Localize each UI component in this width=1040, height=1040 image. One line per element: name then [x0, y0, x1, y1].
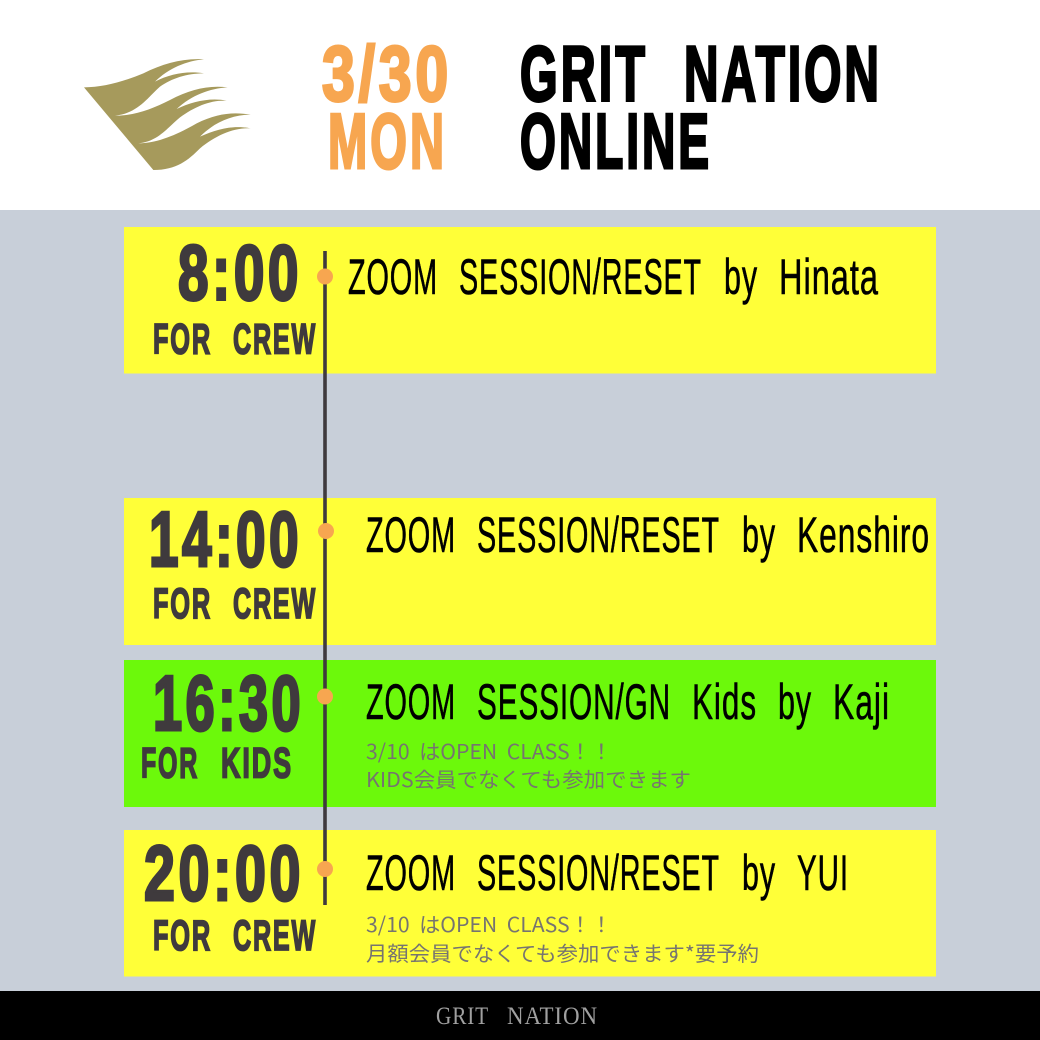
- panel: 8:00 session: by: [724, 249, 758, 305]
- panel: 20:00 session: YUI: [797, 845, 849, 901]
- date: 3/30 MON: [322, 30, 452, 185]
- panel: 20:00 session: ZOOM: [366, 845, 456, 901]
- panel: 14:00 session: 14:00: [149, 495, 302, 583]
- footer bar: GRIT: [436, 1003, 489, 1030]
- panel: 16:30 kids session: [124, 659, 936, 807]
- panel: 14:00 session: CREW: [233, 580, 317, 628]
- title: GRIT NATION ONLINE: GRIT: [520, 30, 648, 118]
- panel: 20:00 session: 3/10 はOPEN CLASS！！: [366, 908, 612, 938]
- panel: 8:00 session: ZOOM: [348, 249, 438, 305]
- icon: gold wing logo: [84, 59, 251, 170]
- panel: 8:00 session: 8:00: [178, 228, 302, 316]
- panel: 8:00 session: Hinata: [779, 249, 879, 305]
- panel: 16:30 kids session: 16:30: [153, 659, 304, 747]
- panel: 8:00 session: [124, 227, 936, 374]
- panel: 14:00 session: Kenshiro: [797, 507, 930, 563]
- panel: 16:30 kids session: by: [778, 674, 812, 730]
- date: 3/30 MON: MON: [328, 97, 447, 185]
- panel: 20:00 session: CREW: [233, 912, 317, 960]
- footer bar: [0, 991, 1040, 1040]
- panel: 20:00 session: [124, 829, 936, 976]
- panel: 14:00 session: FOR: [153, 580, 212, 628]
- title: GRIT NATION ONLINE: ONLINE: [520, 97, 712, 185]
- panel: 14:00 session: by: [742, 507, 776, 563]
- panel: 16:30 kids session: SESSION/GN: [477, 674, 671, 730]
- date: 3/30 MON: 3/30: [322, 30, 452, 118]
- header background: [0, 0, 1040, 210]
- panel: 16:30 kids session: KIDS: [221, 740, 293, 788]
- panel: 16:30 kids session: ZOOM: [366, 674, 456, 730]
- panel: 16:30 kids session: FOR: [141, 740, 199, 788]
- title: GRIT NATION ONLINE: [520, 30, 882, 185]
- panel: 20:00 session: 20:00: [144, 829, 304, 917]
- panel: 14:00 session: SESSION/RESET: [477, 507, 720, 563]
- panel: 16:30 kids session: KIDS会員でなくても参加できます: [366, 763, 691, 793]
- panel: 16:30 kids session: Kids: [692, 674, 757, 730]
- panel: 8:00 session: CREW: [233, 316, 317, 364]
- title: GRIT NATION ONLINE: NATION: [684, 30, 882, 118]
- panel: 14:00 session: [124, 495, 936, 645]
- panel: 16:30 kids session: 3/10 はOPEN CLASS！！: [366, 735, 612, 765]
- panel: 20:00 session: FOR: [153, 912, 212, 960]
- panel: 20:00 session: by: [742, 845, 776, 901]
- footer bar: NATION: [507, 1003, 598, 1030]
- panel: 16:30 kids session: Kaji: [833, 674, 890, 730]
- panel: 20:00 session: 月額会員でなくても参加できます*要予約: [366, 937, 759, 967]
- panel: 8:00 session: FOR: [153, 316, 212, 364]
- panel: 14:00 session: ZOOM: [366, 507, 456, 563]
- page background: [0, 210, 1040, 992]
- panel: 8:00 session: SESSION/RESET: [459, 249, 702, 305]
- timeline with dots: [317, 251, 334, 905]
- panel: 20:00 session: SESSION/RESET: [477, 845, 720, 901]
